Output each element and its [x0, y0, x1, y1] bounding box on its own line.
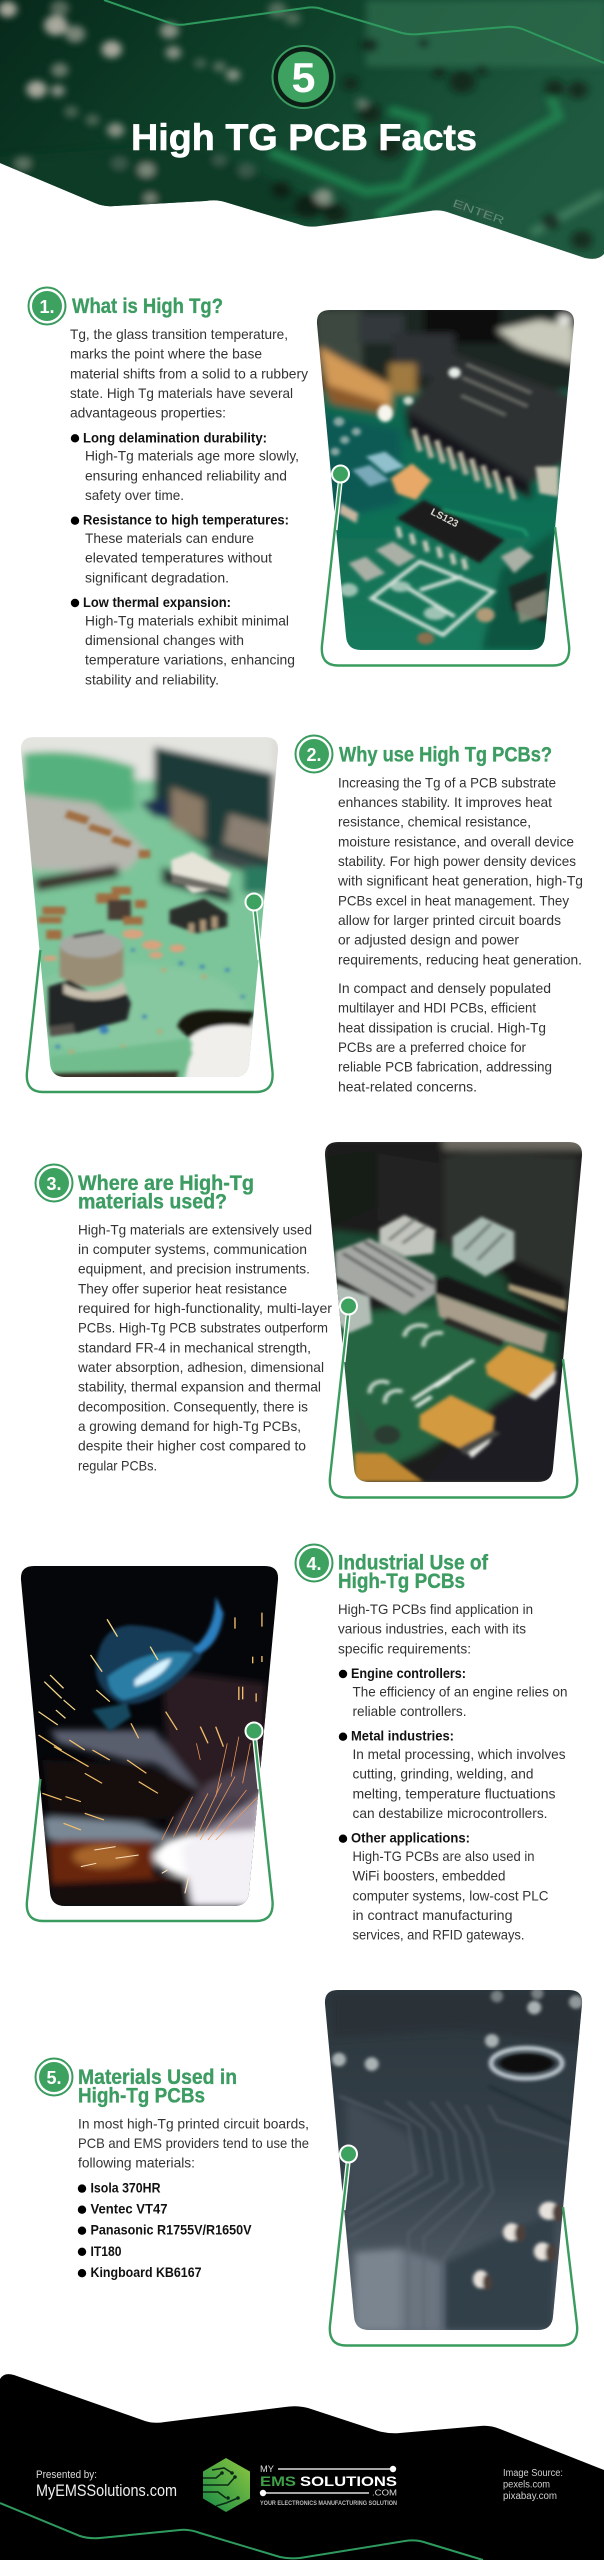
image source — [503, 2468, 563, 2502]
logo: my ems solutions — [203, 2458, 397, 2512]
paragraph: a growing demand for high-Tg PCBs, — [78, 1419, 301, 1434]
intro text: various industries, each with its — [338, 1622, 526, 1637]
bullet list: High-Tg materials exhibit minimal — [85, 613, 289, 628]
heading: Why use High Tg PCBs? — [339, 742, 552, 766]
bullet list: services, and RFID gateways. — [352, 1928, 524, 1943]
bullet list: in contract manufacturing — [352, 1908, 512, 1923]
wordmark: YOUR ELECTRONICS MANUFACTURING SOLUTION — [260, 2501, 397, 2507]
heading: High-Tg PCBs — [78, 2084, 205, 2108]
image source: pixabay.com — [503, 2491, 557, 2502]
paragraph: decomposition. Consequently, there is — [78, 1399, 308, 1414]
icon: badge 4: 4. — [306, 1554, 322, 1574]
frame and connector dot — [322, 466, 569, 666]
bullet list: elevated temperatures without — [85, 551, 272, 566]
intro text: High-TG PCBs find application in — [338, 1602, 533, 1617]
paragraph 1: resistance, chemical resistance, — [338, 815, 531, 830]
paragraph 2: heat dissipation is crucial. High-Tg — [338, 1020, 546, 1035]
intro text: advantageous properties: — [70, 406, 226, 421]
paragraph 2: heat-related concerns. — [338, 1079, 477, 1094]
intro text: material shifts from a solid to a rubbery — [70, 366, 308, 381]
wordmark: .COM — [372, 2488, 397, 2498]
bullet list: computer systems, low-cost PLC — [352, 1888, 549, 1903]
icon: badge 3: 3. — [46, 1174, 62, 1194]
paragraph: regular PCBs. — [78, 1458, 157, 1473]
photo: dark pcb traces macro — [324, 1990, 582, 2330]
paragraph — [77, 1222, 332, 1473]
intro text: following materials: — [78, 2156, 195, 2170]
paragraph 2: reliable PCB fabrication, addressing — [338, 1060, 552, 1075]
heading: Where are High-Tg — [78, 1171, 254, 1195]
materials list: Panasonic R1755V/R1650V — [90, 2223, 252, 2238]
paragraph 1: enhances stability. It improves heat — [338, 795, 552, 810]
chip marking text: LS123 — [429, 507, 460, 530]
materials list: Kingboard KB6167 — [90, 2265, 202, 2280]
bullet list: significant degradation. — [85, 570, 229, 585]
"ENTER" silk-screen label: ENTER — [451, 198, 506, 227]
presented by: MyEMSSolutions.com — [36, 2481, 177, 2500]
title: High TG PCB Facts — [131, 117, 477, 158]
paragraph: water absorption, adhesion, dimensional — [77, 1360, 324, 1375]
paragraph 1: stability. For high power density devices — [338, 854, 576, 869]
intro text — [78, 2116, 309, 2170]
presented by: Presented by: — [36, 2469, 97, 2481]
bullet list: dimensional changes with — [85, 633, 244, 648]
paragraph 2: In compact and densely populated — [338, 981, 551, 996]
intro text: PCB and EMS providers tend to use the — [78, 2136, 309, 2151]
bullet list: Metal industries: — [351, 1729, 454, 1744]
intro text: state. High Tg materials have several — [70, 386, 293, 401]
bullet list: Long delamination durability: — [83, 430, 267, 445]
paragraph: High-Tg materials are extensively used — [78, 1222, 312, 1237]
materials list: Isola 370HR — [90, 2181, 161, 2196]
bullet list: In metal processing, which involves — [352, 1747, 566, 1762]
paragraph 1: requirements, reducing heat generation. — [338, 952, 582, 967]
paragraph 1: PCBs excel in heat management. They — [338, 893, 569, 908]
frame and connector dot — [27, 894, 273, 1092]
panel: section 1 what is high tg — [28, 288, 586, 687]
photo: welding sparks — [15, 1563, 285, 1910]
intro text — [338, 1602, 533, 1656]
bullet list: can destabilize microcontrollers. — [352, 1806, 548, 1821]
intro text: specific requirements: — [338, 1641, 471, 1656]
icon: badge 3 — [36, 1164, 72, 1202]
bullet list: Low thermal expansion: — [83, 595, 231, 610]
paragraph: in computer systems, communication — [78, 1242, 307, 1257]
bullet list: cutting, grinding, welding, and — [352, 1767, 534, 1782]
materials list — [78, 2181, 252, 2280]
panel: section 5 materials used — [36, 1985, 590, 2346]
heading: What is High Tg? — [72, 294, 223, 318]
panel: section 4 industrial use — [15, 1544, 567, 1943]
image source: Image Source: — [503, 2468, 563, 2479]
heading: materials used? — [78, 1190, 227, 1214]
heading — [338, 1550, 489, 1593]
intro text: marks the point where the base — [70, 347, 262, 362]
heading: Industrial Use of — [338, 1550, 489, 1574]
paragraph 1: or adjusted design and power — [338, 933, 519, 948]
paragraph: PCBs. High-Tg PCB substrates outperform — [78, 1321, 328, 1336]
icon: badge 5: 5. — [46, 2068, 62, 2088]
paragraph: despite their higher cost compared to — [78, 1439, 306, 1454]
paragraph 1: moisture resistance, and overall device — [338, 834, 574, 849]
icon: badge 2: 2. — [306, 745, 322, 765]
photo: raspberry pi style board — [320, 1137, 589, 1487]
bullet list — [71, 430, 299, 687]
title group — [131, 46, 477, 158]
panel: section 3 where are high-tg materials used — [36, 1137, 589, 1498]
header banner: circuit board photo — [0, 0, 604, 270]
bullet list: Other applications: — [351, 1831, 470, 1846]
paragraph 1: with significant heat generation, high-Tg — [337, 874, 583, 889]
paragraph 2 — [338, 981, 552, 1094]
bullet list: ensuring enhanced reliability and — [85, 468, 287, 483]
paragraph 2: PCBs are a preferred choice for — [338, 1040, 526, 1055]
bullet list: Resistance to high temperatures: — [83, 513, 289, 528]
paragraph: equipment, and precision instruments. — [78, 1262, 310, 1277]
bullet list: stability and reliability. — [85, 672, 219, 687]
heading: Materials Used in — [78, 2065, 237, 2089]
icon: circuit hexagon — [203, 2458, 250, 2512]
bullet list: High-TG PCBs are also used in — [352, 1849, 534, 1864]
frame and connector dot — [330, 2146, 577, 2346]
frame and connector dot — [330, 1298, 577, 1498]
paragraph 1 — [337, 775, 583, 967]
intro text: Tg, the glass transition temperature, — [70, 327, 288, 342]
image source: pexels.com — [503, 2480, 550, 2490]
footer panel — [0, 2374, 604, 2560]
panel: section 2 why use high tg — [15, 733, 583, 1094]
wordmark: SOLUTIONS — [300, 2474, 397, 2489]
paragraph: They offer superior heat resistance — [78, 1281, 287, 1296]
wordmark — [260, 2464, 397, 2507]
heading: High-Tg PCBs — [338, 1569, 465, 1593]
bullet list: The efficiency of an engine relies on — [352, 1684, 568, 1699]
paragraph 1: allow for larger printed circuit boards — [338, 913, 561, 928]
heading — [78, 2065, 237, 2108]
paragraph: standard FR-4 in mechanical strength, — [78, 1340, 311, 1355]
icon: number 5 badge — [272, 46, 334, 108]
header trace line — [104, 0, 604, 63]
bullet list: safety over time. — [85, 488, 184, 503]
paragraph 2: multilayer and HDI PCBs, efficient — [338, 1001, 536, 1016]
bullet list: reliable controllers. — [352, 1704, 466, 1719]
paragraph 1: Increasing the Tg of a PCB substrate — [338, 775, 556, 790]
intro text — [70, 327, 308, 421]
intro text: In most high-Tg printed circuit boards, — [78, 2116, 309, 2131]
wordmark: MY — [260, 2464, 274, 2474]
icon: number 5 badge: 5 — [292, 54, 316, 101]
paragraph: required for high-functionality, multi-layer — [78, 1301, 332, 1316]
photo: circuit board with chips — [316, 310, 574, 650]
bullet list: High-Tg materials age more slowly, — [85, 449, 299, 464]
paragraph: stability, thermal expansion and thermal — [78, 1380, 321, 1395]
bullet list: Engine controllers: — [351, 1666, 466, 1681]
bullet list: melting, temperature fluctuations — [352, 1786, 556, 1801]
icon: badge 1: 1. — [39, 297, 55, 317]
icon: badge 5 — [36, 2058, 72, 2096]
icon: badge 4 — [296, 1544, 332, 1582]
wordmark: EMS — [260, 2474, 296, 2489]
presented by — [36, 2469, 177, 2500]
bullet list: These materials can endure — [85, 531, 254, 546]
bullet list: WiFi boosters, embedded — [352, 1869, 506, 1884]
heading — [78, 1171, 254, 1214]
materials list: Ventec VT47 — [90, 2202, 168, 2217]
footer trace line — [0, 2503, 483, 2560]
icon: badge 1 — [28, 288, 66, 324]
materials list: IT180 — [90, 2244, 122, 2259]
photo: green board with capacitor — [15, 733, 285, 1083]
icon: badge 2 — [296, 736, 332, 772]
bullet list: temperature variations, enhancing — [85, 653, 295, 668]
frame and connector dot — [27, 1722, 273, 1921]
bullet list — [339, 1666, 568, 1943]
